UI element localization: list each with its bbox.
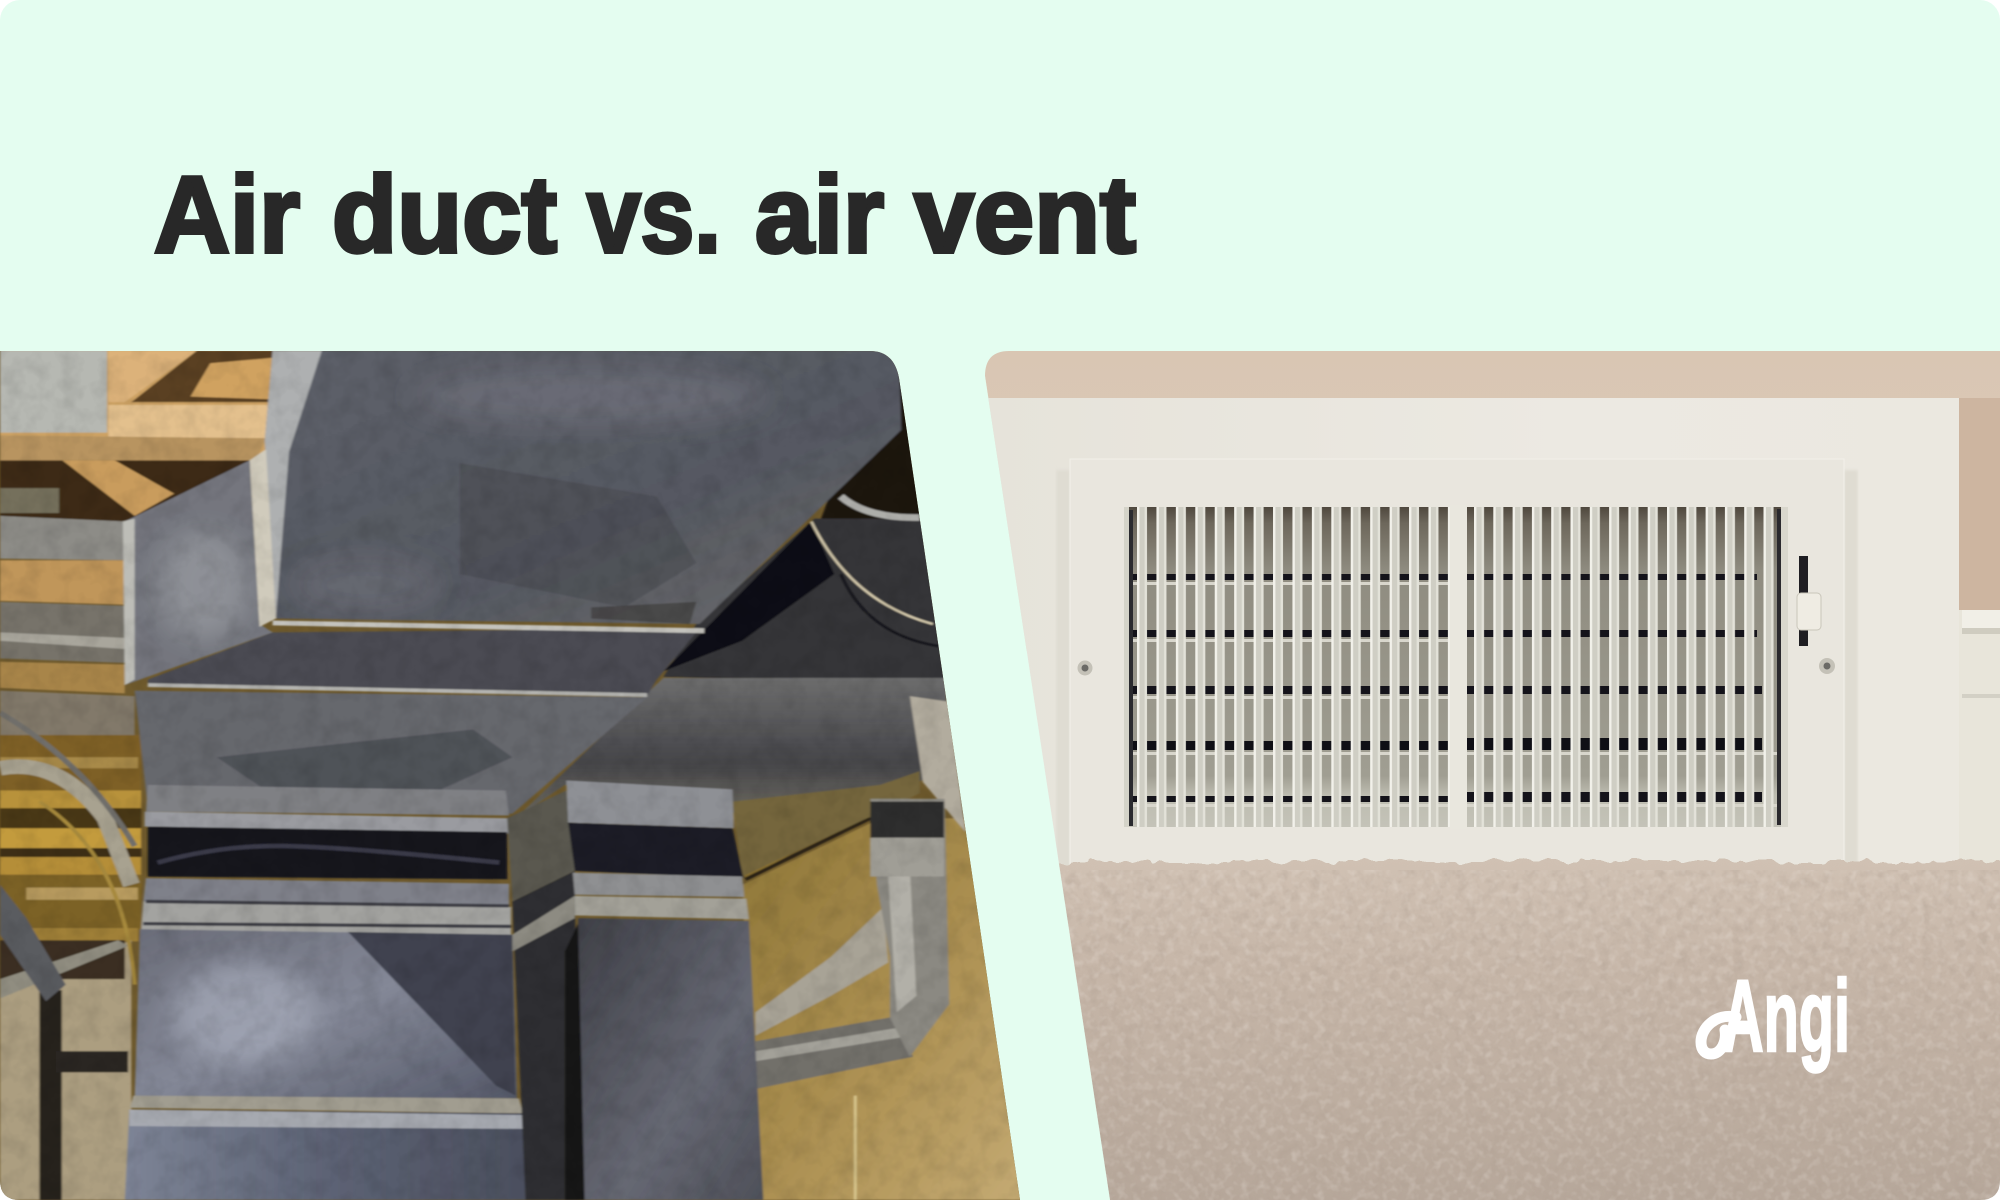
centre post [1450,505,1467,829]
flexible connector and banding, left column [141,812,511,940]
duct drawing [0,347,1030,1200]
damper slot and lever [1797,556,1821,646]
main upper duct [265,351,901,624]
title: air [755,154,884,276]
title: vs. [587,154,721,276]
vent outer plate [985,398,1959,878]
left transition duct [123,449,276,685]
plenum [516,678,966,876]
right louvers [1467,507,1788,827]
lower left duct body [125,929,526,1200]
title: vent [914,154,1136,276]
screw right [1819,658,1835,674]
title: duct [332,154,557,276]
photo: air vent [980,351,2000,1200]
right duct column [507,780,763,1200]
wood framing [0,347,276,1200]
title: Air [154,154,300,276]
logo: Angi [1701,959,1850,1073]
gap strip covering carpet overflow [980,351,1110,1200]
pipes at left [0,713,135,1200]
carpet [1040,861,2000,1200]
wall [980,351,2000,651]
logo: Angi: Angi [1722,959,1850,1073]
screw left [1078,660,1092,676]
baseboard [1959,610,2000,870]
right wall and lower right background [663,358,1030,1200]
left louvers [1124,507,1450,827]
metal texture [0,351,1040,1200]
photo: air duct [0,347,1040,1200]
lower transition [135,623,704,815]
vent inner plate [1070,459,1844,879]
vent grille [1124,505,1788,829]
silver vent pipes [755,799,949,1089]
